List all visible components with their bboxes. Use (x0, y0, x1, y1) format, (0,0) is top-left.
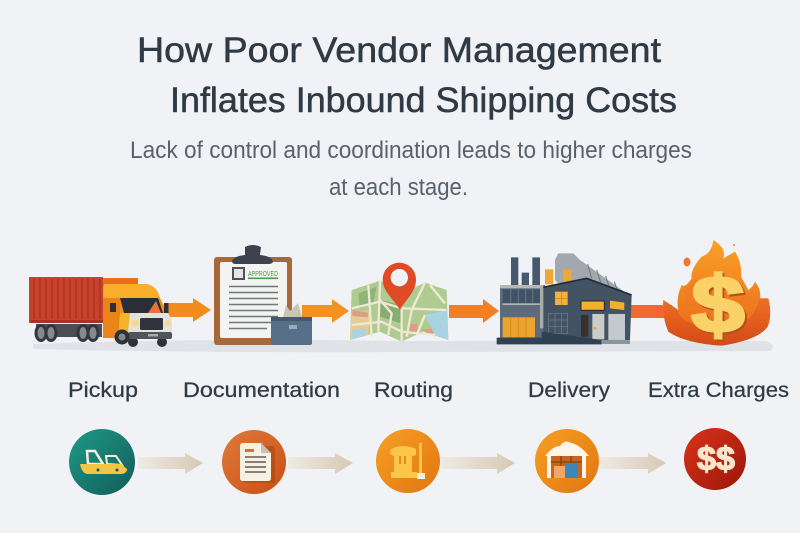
icon: routing (376, 429, 440, 493)
truck container (29, 277, 103, 323)
icon: extra charges (684, 428, 746, 490)
illustration: factory (497, 253, 632, 344)
title (137, 31, 677, 120)
step labels (68, 379, 789, 402)
arrow: truck to clipboard (165, 298, 211, 322)
document lines (229, 286, 278, 328)
location pin (383, 263, 416, 310)
map roads (352, 281, 447, 342)
main block (543, 278, 632, 340)
illustration: truck (29, 277, 172, 347)
factory base (497, 332, 602, 344)
flames (663, 240, 770, 346)
left block (500, 285, 545, 340)
title: How Poor Vendor Management (137, 31, 661, 70)
truck upper panel (100, 278, 138, 287)
step labels: Delivery (528, 379, 611, 402)
truck chassis and wheels (36, 324, 102, 337)
dollar sign: $ (691, 260, 745, 349)
title: Inflates Inbound Shipping Costs (170, 81, 677, 120)
truck cab (103, 285, 168, 338)
arrow: clipboard to map (302, 299, 349, 323)
icon: document (222, 430, 286, 494)
approved stamp (233, 268, 244, 279)
toolbox (283, 303, 302, 317)
arrow: pickup step (138, 453, 203, 474)
illustration: burning dollar (663, 240, 770, 351)
arrow: delivery step (599, 453, 666, 474)
arrow: map to factory (449, 299, 499, 323)
step labels: Pickup (68, 379, 138, 402)
illustration: map with pin (350, 263, 448, 342)
illustration: clipboard (214, 245, 312, 345)
smokestacks (511, 257, 540, 286)
rooftop crates (545, 269, 553, 284)
subtitle (130, 137, 692, 201)
clipboard clip (232, 245, 273, 264)
arrow: factory to fire (630, 305, 672, 318)
illustration: clipboard: APPROVED (248, 271, 278, 278)
subtitle: at each stage. (329, 174, 468, 201)
arrow: documentation step (288, 453, 353, 474)
dollar sign: $ (693, 262, 747, 351)
icon: pickup truck (69, 429, 135, 495)
subtitle: Lack of control and coordination leads to higher charges (130, 137, 692, 164)
step labels: Extra Charges (648, 379, 789, 402)
icon: delivery warehouse (535, 429, 599, 493)
factory roof (555, 253, 626, 293)
icon: extra charges: $$ (697, 440, 735, 477)
step labels: Documentation (183, 379, 340, 402)
ground shadow (33, 340, 773, 352)
step labels: Routing (374, 379, 453, 402)
arrow: routing step (441, 453, 515, 474)
